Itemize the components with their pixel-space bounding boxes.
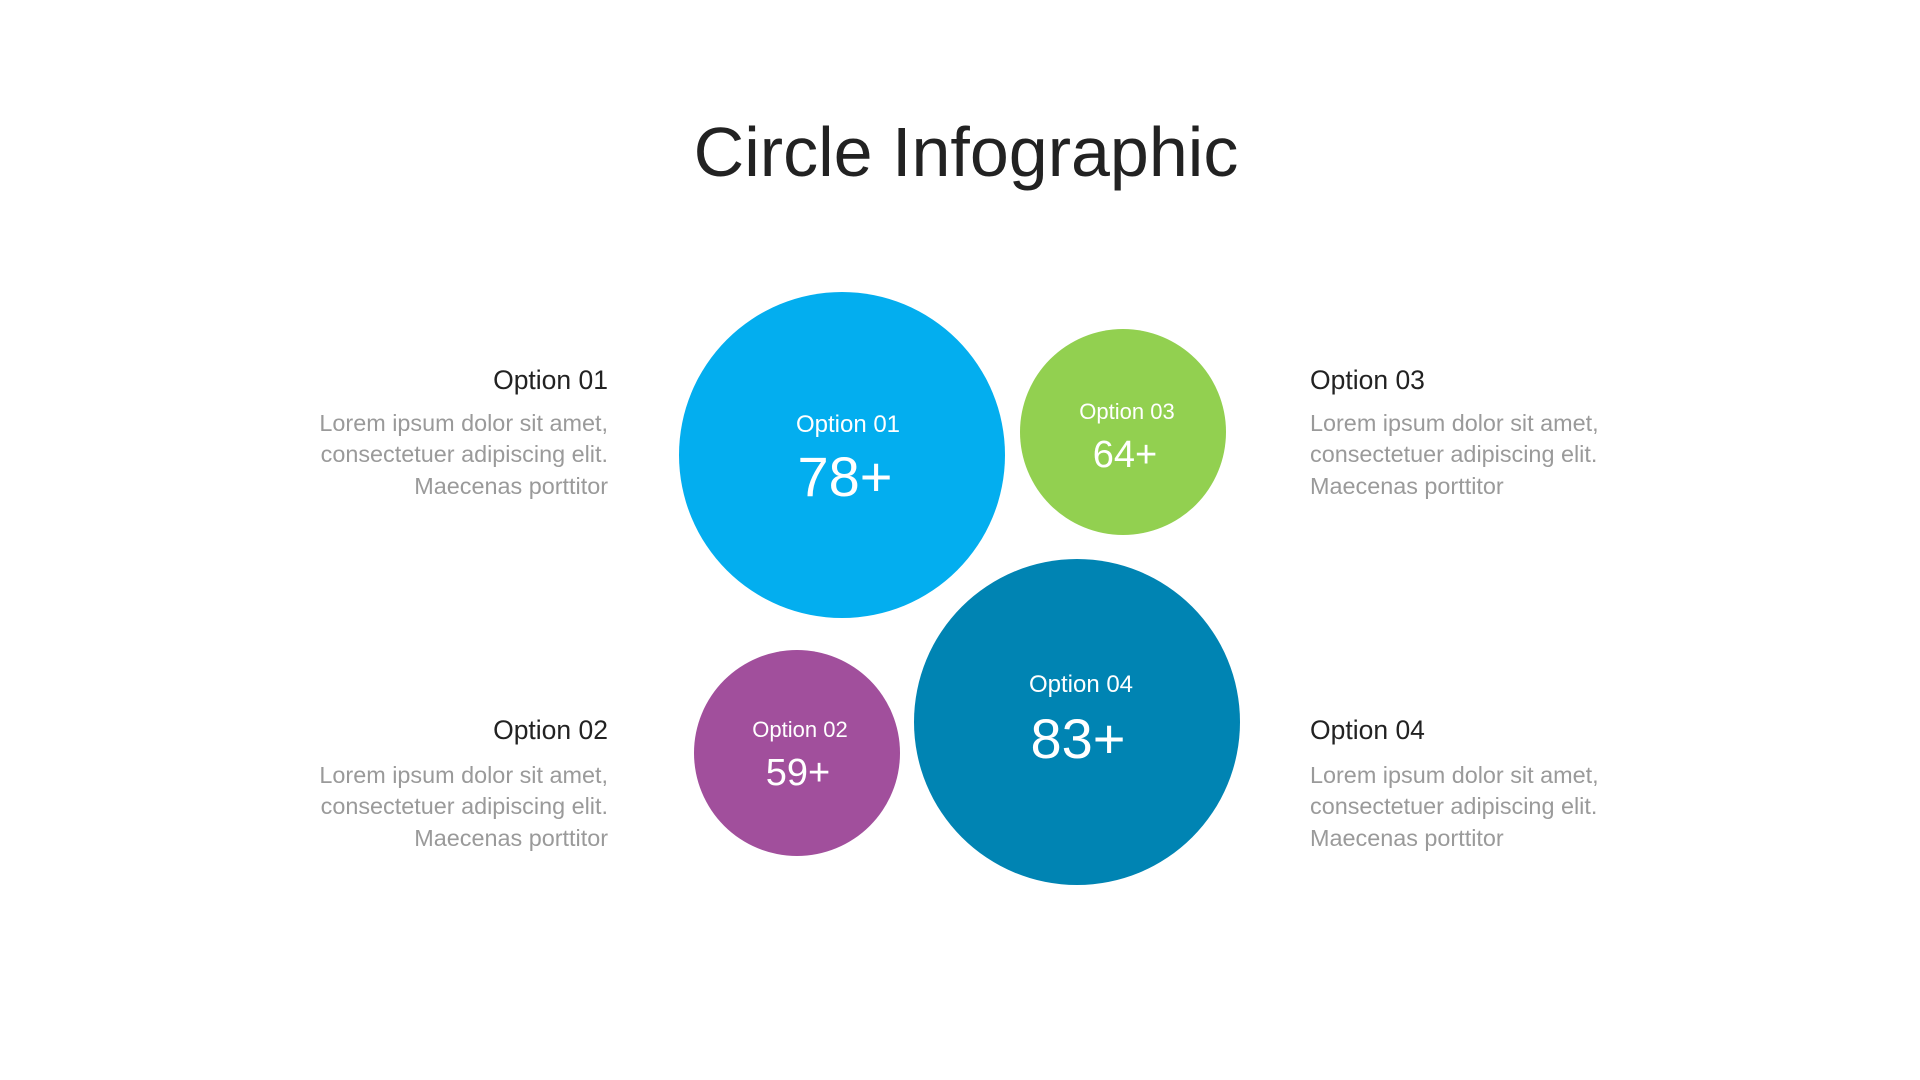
panel: option 01 text: Option 01 bbox=[493, 365, 608, 395]
panel: option 03 text: Lorem ipsum dolor sit amet, bbox=[1310, 410, 1599, 436]
circle: option 02: 59+ bbox=[766, 752, 830, 794]
panel: option 01 text: consectetuer adipiscing elit. bbox=[321, 441, 608, 467]
panel: option 01 text: Lorem ipsum dolor sit amet, bbox=[319, 410, 608, 436]
panel: option 04 text: Maecenas porttitor bbox=[1310, 825, 1504, 851]
panel: option 03 text: Option 03 bbox=[1310, 365, 1425, 395]
panel: option 02 text bbox=[319, 715, 608, 851]
panel: option 01 text bbox=[319, 365, 608, 499]
title: Circle Infographic bbox=[694, 113, 1238, 191]
panel: option 04 text: Lorem ipsum dolor sit amet, bbox=[1310, 762, 1599, 788]
panel: option 01 text: Maecenas porttitor bbox=[414, 473, 608, 499]
circle: option 03 bbox=[1020, 329, 1226, 535]
panel: option 02 text: Option 02 bbox=[493, 715, 608, 745]
circle: option 01 bbox=[679, 292, 1005, 618]
panel: option 02 text: Lorem ipsum dolor sit amet, bbox=[319, 762, 608, 788]
panel: option 03 text: Maecenas porttitor bbox=[1310, 473, 1504, 499]
circle: option 04: Option 04 bbox=[1029, 671, 1133, 698]
circle: option 04: 83+ bbox=[1030, 707, 1126, 770]
circle: option 02: Option 02 bbox=[752, 717, 848, 742]
circle: option 01: Option 01 bbox=[796, 411, 900, 438]
circle: option 03: 64+ bbox=[1093, 434, 1157, 476]
circle: option 01: 78+ bbox=[798, 445, 892, 508]
circle: option 02 bbox=[694, 650, 900, 856]
panel: option 04 text bbox=[1310, 715, 1599, 851]
panel: option 02 text: Maecenas porttitor bbox=[414, 825, 608, 851]
panel: option 03 text bbox=[1310, 365, 1599, 499]
panel: option 03 text: consectetuer adipiscing elit. bbox=[1310, 441, 1597, 467]
circle: option 03: Option 03 bbox=[1079, 399, 1175, 424]
panel: option 04 text: consectetuer adipiscing elit. bbox=[1310, 793, 1597, 819]
panel: option 02 text: consectetuer adipiscing elit. bbox=[321, 793, 608, 819]
circle: option 04 bbox=[914, 559, 1240, 885]
panel: option 04 text: Option 04 bbox=[1310, 715, 1425, 745]
